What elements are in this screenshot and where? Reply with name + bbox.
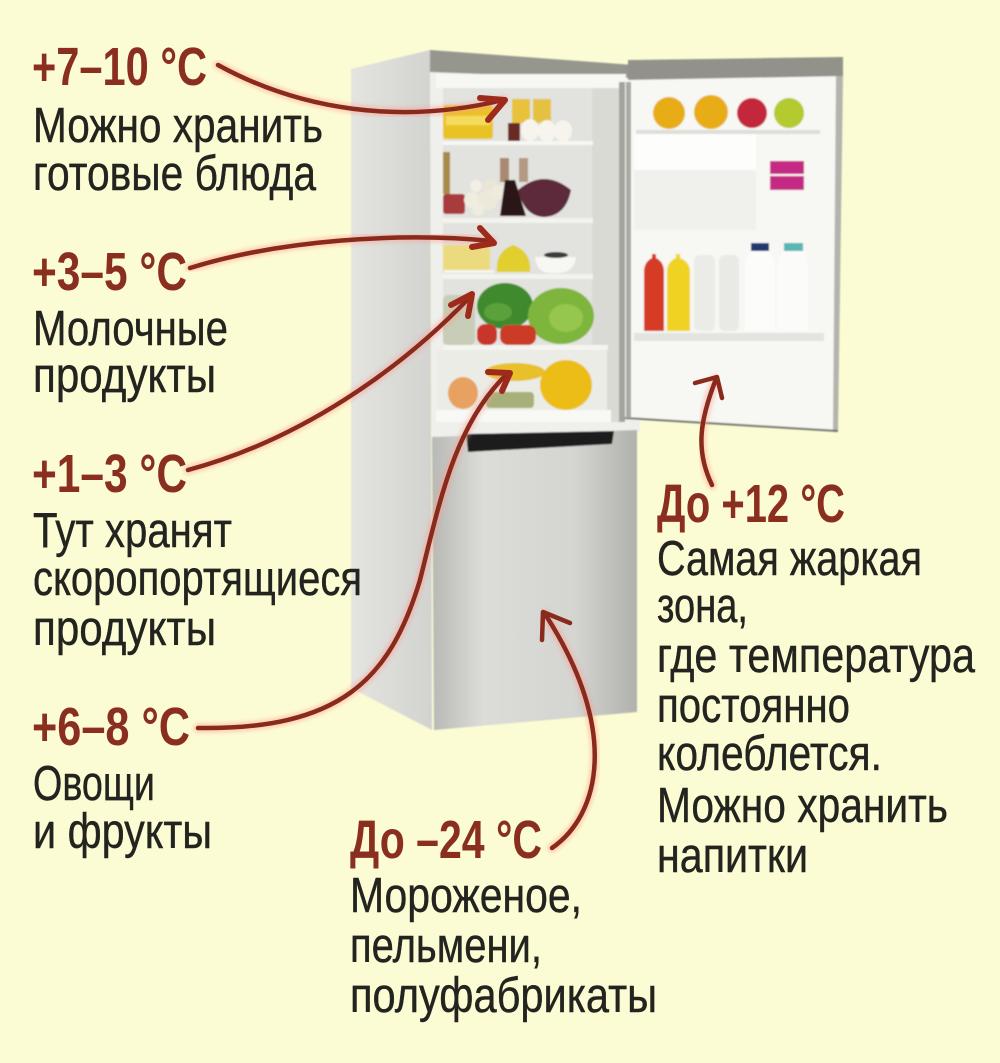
door handle <box>466 431 614 452</box>
label: vegetable shelf: +1–3 °C <box>32 444 187 504</box>
arrow: +7–10 to top shelf <box>218 65 505 120</box>
label: door: постоянно <box>657 679 850 733</box>
label: vegetable shelf: продукты <box>33 602 216 656</box>
label: top shelf: готовые блюда <box>33 147 317 201</box>
label: door: зона, <box>657 579 748 633</box>
fridge front frame <box>430 72 640 440</box>
label: door: До +12 °C <box>657 474 845 534</box>
arrow: +6–8 to fruit drawer <box>198 372 510 728</box>
lower freezer door <box>432 430 637 730</box>
label: fruit drawer <box>32 697 212 859</box>
label: vegetable shelf <box>32 444 362 656</box>
fridge side panel <box>351 50 432 730</box>
label: vegetable shelf: Тут хранят <box>33 504 232 558</box>
arrow: to freezer <box>542 612 595 848</box>
third shelf food <box>443 245 593 279</box>
fridge top edge <box>430 50 634 82</box>
label: door <box>657 474 976 883</box>
label: freezer: Мороженое, <box>350 869 582 923</box>
label: door: Можно хранить <box>657 779 948 833</box>
vegetable shelf food <box>443 283 608 350</box>
open door <box>625 57 843 432</box>
label: top shelf <box>32 37 323 201</box>
fruit drawer <box>436 350 611 422</box>
label: freezer <box>350 810 657 1023</box>
arrow: +1–3 to vegetable shelf <box>188 294 472 470</box>
door fruit <box>653 95 804 129</box>
label: freezer: полуфабрикаты <box>350 969 657 1023</box>
label: second shelf: +3–5 °C <box>32 242 187 302</box>
top shelf food <box>443 99 593 145</box>
second shelf food <box>443 152 593 223</box>
arrow: +3–5 to second shelf <box>190 228 494 268</box>
label: top shelf: +7–10 °C <box>32 37 207 97</box>
label: fruit drawer: и фрукты <box>33 805 212 859</box>
label: second shelf: продукты <box>33 349 216 403</box>
label: door: колеблется. <box>657 727 882 781</box>
label: fruit drawer: +6–8 °C <box>32 697 190 757</box>
label: freezer: пельмени, <box>350 919 542 973</box>
arrow: to door <box>695 377 722 485</box>
label: door: напитки <box>657 829 808 883</box>
door bottles <box>644 243 808 331</box>
label: second shelf: Молочные <box>33 302 228 356</box>
label: fruit drawer: Овощи <box>33 757 155 811</box>
fridge interior <box>436 74 626 422</box>
label: top shelf: Можно хранить <box>33 99 323 153</box>
refrigerator <box>351 50 843 730</box>
pink containers <box>770 161 804 190</box>
label: door: Самая жаркая <box>657 532 922 586</box>
label: freezer: До –24 °C <box>350 810 542 870</box>
label: second shelf <box>32 242 228 403</box>
label: vegetable shelf: скоропортящиеся <box>33 552 362 606</box>
